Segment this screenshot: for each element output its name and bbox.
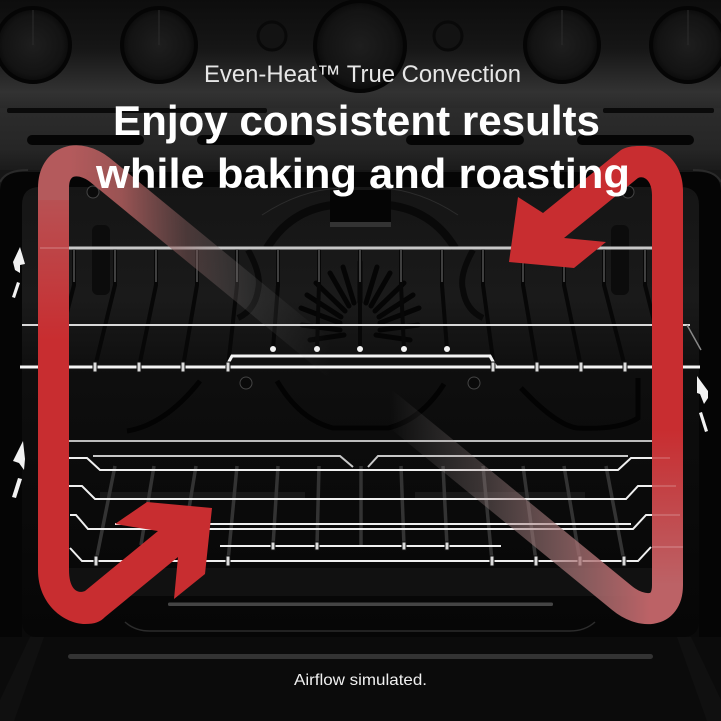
lower rack rails <box>69 441 652 561</box>
fan rays <box>301 262 419 340</box>
floor panel <box>0 637 721 721</box>
title <box>95 97 630 197</box>
title line 2: while baking and roasting <box>95 150 630 197</box>
rack dots <box>270 346 450 352</box>
icon: left upper side arrow <box>12 247 25 298</box>
icon: right side arrow <box>697 376 708 432</box>
airflow arrow: faded upper-left diagonal <box>54 161 340 367</box>
upper rack rails <box>40 246 652 250</box>
control panel <box>0 0 721 108</box>
airflow arrow: upper-right solid arrow <box>509 146 683 585</box>
subtitle: Even-Heat™ True Convection <box>204 61 521 88</box>
airflow arrow: lower-left solid arrow <box>38 340 212 624</box>
reflection band <box>100 492 305 498</box>
vent band <box>0 108 721 190</box>
rail clips <box>93 362 627 372</box>
footnote: Airflow simulated. <box>294 672 427 689</box>
title line 1: Enjoy consistent results <box>113 97 600 144</box>
airflow arrow: faded lower-right diagonal <box>380 400 668 609</box>
oven cavity back wall <box>22 187 699 637</box>
icon: left lower side arrow <box>12 441 25 498</box>
knobs <box>0 1 721 91</box>
upper rack tines <box>60 248 660 367</box>
upper rack <box>20 246 701 372</box>
lower rack <box>60 441 660 659</box>
lower rack tines <box>96 466 624 561</box>
bottom element and door bar <box>168 602 553 606</box>
rails seen through the faded arrow <box>40 248 683 547</box>
convection fan cover <box>87 186 638 431</box>
